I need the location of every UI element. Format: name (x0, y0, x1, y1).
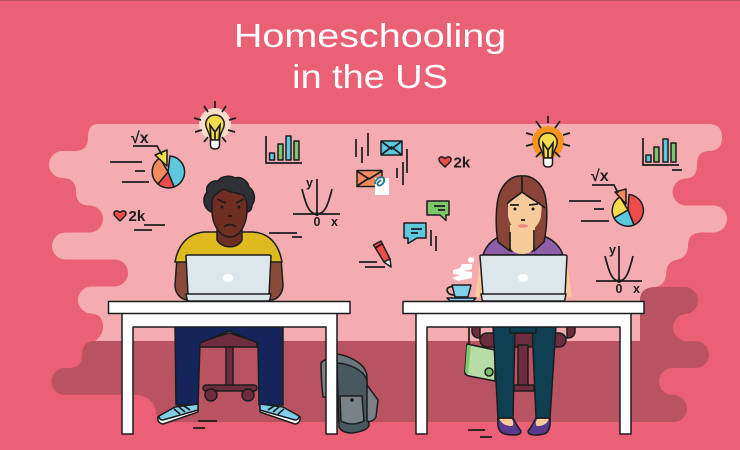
table left (108, 302, 350, 434)
icon: orange envelope with attachment (357, 170, 389, 195)
icon: parabola graph left: 0 (314, 215, 320, 229)
icon: parabola graph right: 0 (616, 282, 622, 296)
woman hair (496, 176, 547, 251)
man arms (175, 258, 283, 300)
icon: pencil (359, 241, 391, 267)
icon: heart likes middle: 2k (454, 154, 471, 172)
icon: parabola graph left: y (306, 176, 313, 190)
background: dark floor band (52, 287, 709, 422)
icon: message lines and blue envelope (356, 133, 407, 185)
motion lines under woman's desk (468, 430, 492, 437)
title: Homeschooling (234, 17, 506, 54)
background: light pink blob (49, 124, 727, 341)
icon: bar chart right (643, 138, 682, 170)
title: in the US (292, 58, 448, 95)
woman shirt (483, 237, 563, 255)
icon: pie chart right: √x (591, 168, 609, 185)
woman legs (493, 326, 556, 418)
icon: parabola graph right: y (609, 243, 616, 257)
man face (212, 189, 247, 237)
man shoes (158, 404, 300, 424)
icon: light bulb left (194, 101, 236, 149)
man neck (217, 230, 242, 247)
icon: pie chart right (569, 168, 643, 226)
woman features (510, 204, 538, 228)
woman laptop (480, 255, 567, 301)
coffee cup with steam (447, 257, 476, 301)
character: woman (465, 176, 575, 435)
title (234, 17, 506, 95)
icon: heart likes middle (439, 154, 471, 172)
icon: heart likes left: 2k (128, 208, 146, 225)
man chair (200, 333, 257, 401)
icon: parabola graph right: x (633, 282, 640, 296)
icon: pie chart left (110, 130, 185, 188)
woman shoes (498, 418, 550, 435)
icon: green speech bubble (427, 201, 449, 220)
woman bag (465, 326, 495, 381)
icon: blue speech bubble (404, 223, 436, 251)
woman neck and face (510, 225, 535, 254)
man trousers (175, 325, 283, 405)
character: man (158, 176, 300, 424)
man laptop (186, 255, 271, 301)
table right (403, 302, 644, 434)
man hair (204, 176, 254, 212)
icon: parabola graph left (293, 176, 340, 229)
motion lines under man's desk (193, 421, 217, 428)
man shirt (175, 232, 282, 262)
icon: light bulb right (526, 116, 570, 167)
man features (217, 199, 244, 227)
icon: parabola graph left: x (331, 215, 338, 229)
woman chair (472, 326, 575, 391)
icon: heart likes left (114, 208, 165, 230)
backpack (321, 354, 378, 433)
icon: bar chart left (266, 136, 302, 163)
icon: parabola graph right (596, 243, 642, 296)
accent lines near man (269, 233, 302, 237)
woman arms (475, 255, 572, 297)
icon: pie chart left: √x (131, 130, 149, 147)
